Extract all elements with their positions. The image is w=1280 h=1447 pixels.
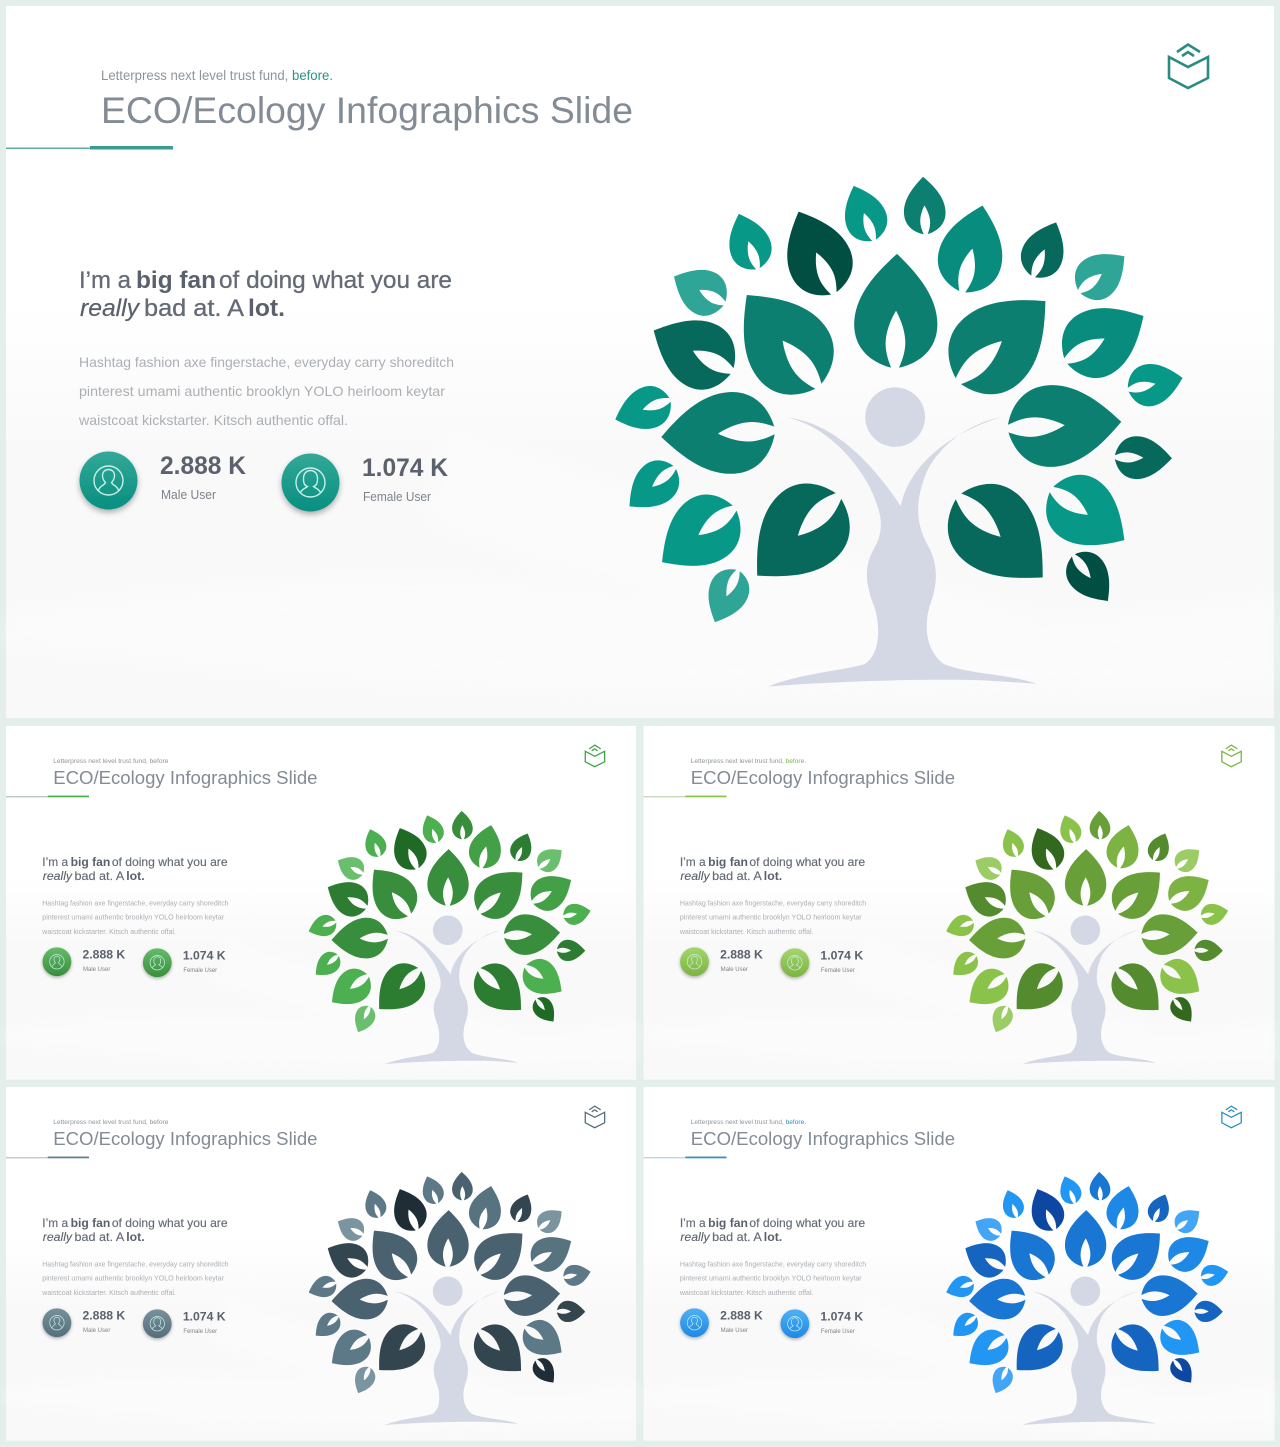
stat: male user: Male User — [83, 1327, 110, 1334]
stat: male user: Male User — [721, 966, 748, 973]
stat: female user — [143, 948, 226, 977]
body paragraph — [41, 1261, 229, 1297]
body paragraph: pinterest umami authentic brooklyn YOLO heirloom keytar — [680, 915, 862, 922]
slide: blue variant — [644, 1087, 1275, 1441]
heading: really — [43, 869, 73, 883]
stat: female user: Female User — [183, 967, 217, 974]
title underline — [644, 796, 727, 797]
heading: really — [43, 1230, 73, 1244]
heading: bad at. A — [712, 1230, 762, 1244]
body paragraph: waistcoat kickstarter. Kitsch authentic offal. — [679, 929, 814, 936]
title: ECO/Ecology Infographics Slide — [691, 1128, 955, 1149]
tree illustration — [943, 1171, 1230, 1425]
title underline — [6, 1157, 89, 1158]
body paragraph: pinterest umami authentic brooklyn YOLO heirloom keytar — [42, 915, 225, 922]
header subtitle: Letterpress next level trust fund, before. — [101, 68, 333, 83]
heading: bad at. A — [712, 869, 762, 883]
body paragraph: waistcoat kickstarter. Kitsch authentic offal. — [41, 1290, 176, 1297]
stat: female user: 1.074 K — [183, 1309, 226, 1323]
heading: bad at. A — [75, 869, 124, 883]
tree illustration — [305, 1171, 593, 1425]
slide background — [644, 1087, 1275, 1441]
icon: cube logo — [585, 745, 605, 767]
heading: big fan — [136, 267, 216, 294]
stat: female user — [143, 1309, 226, 1338]
stat: male user: 2.888 K — [720, 948, 763, 962]
slide background — [6, 6, 1274, 718]
body paragraph: Hashtag fashion axe fingerstache, everyday carry shoreditch — [42, 900, 229, 907]
stat: female user — [780, 948, 863, 977]
heading: lot. — [248, 295, 285, 322]
body paragraph: Hashtag fashion axe fingerstache, everyday carry shoreditch — [680, 900, 866, 907]
body paragraph: pinterest umami authentic brooklyn YOLO heirloom keytar — [42, 1276, 225, 1283]
stat: female user: Female User — [821, 1328, 855, 1335]
stat: female user: Female User — [821, 967, 855, 974]
body paragraph — [679, 1261, 866, 1297]
stat: male user — [80, 452, 246, 510]
header subtitle: Letterpress next level trust fund, before — [53, 758, 169, 765]
heading: bad at. A — [75, 1230, 124, 1244]
tree trunk figure — [769, 387, 1037, 686]
title: ECO/Ecology Infographics Slide — [53, 1128, 317, 1149]
heading: I’m a — [42, 1216, 68, 1230]
header subtitle: Letterpress next level trust fund, before — [53, 1119, 169, 1126]
slide background — [644, 726, 1275, 1080]
stat: female user — [282, 454, 448, 512]
body paragraph: Hashtag fashion axe fingerstache, everyday carry shoreditch — [79, 354, 454, 370]
heading — [680, 855, 866, 883]
header subtitle: Letterpress next level trust fund, before. — [691, 1119, 806, 1126]
stat: male user: 2.888 K — [83, 948, 125, 962]
stat: male user: Male User — [161, 488, 216, 502]
stat: male user — [680, 947, 763, 976]
icon: cube logo — [1222, 745, 1241, 767]
heading: of doing what you are — [749, 855, 866, 869]
body paragraph: waistcoat kickstarter. Kitsch authentic offal. — [41, 929, 176, 936]
heading: lot. — [126, 1230, 145, 1244]
stat: female user: 1.074 K — [183, 948, 226, 962]
heading: bad at. A — [144, 295, 244, 322]
heading: really — [680, 1230, 711, 1244]
slide background — [6, 1087, 636, 1441]
body paragraph: pinterest umami authentic brooklyn YOLO heirloom keytar — [680, 1276, 862, 1283]
body paragraph: waistcoat kickstarter. Kitsch authentic offal. — [679, 1290, 814, 1297]
heading: really — [80, 295, 141, 322]
title: ECO/Ecology Infographics Slide — [53, 767, 317, 788]
heading — [79, 267, 452, 322]
tree illustration — [305, 810, 593, 1064]
heading: lot. — [764, 1230, 782, 1244]
heading: really — [680, 869, 711, 883]
heading: lot. — [126, 869, 145, 883]
tree illustration — [608, 176, 1187, 686]
title: ECO/Ecology Infographics Slide — [101, 90, 633, 131]
body paragraph: Hashtag fashion axe fingerstache, everyday carry shoreditch — [680, 1261, 866, 1268]
slide: green variant — [6, 726, 636, 1080]
stat: female user: 1.074 K — [820, 1309, 863, 1323]
slide background — [6, 726, 636, 1080]
heading: I’m a — [680, 855, 706, 869]
heading: big fan — [708, 1216, 748, 1230]
heading: I’m a — [680, 1216, 706, 1230]
heading: of doing what you are — [112, 1216, 228, 1230]
header subtitle: Letterpress next level trust fund, before. — [691, 758, 806, 765]
heading — [42, 1216, 228, 1244]
stat: male user: 2.888 K — [160, 452, 246, 480]
heading: of doing what you are — [112, 855, 228, 869]
heading — [680, 1216, 866, 1244]
heading: I’m a — [79, 267, 132, 294]
title: ECO/Ecology Infographics Slide — [691, 767, 955, 788]
title underline — [644, 1157, 727, 1158]
slide: main teal — [6, 6, 1274, 718]
stat: male user: Male User — [721, 1327, 748, 1334]
body paragraph — [78, 354, 454, 428]
icon: cube logo — [1222, 1106, 1241, 1128]
leaves canopy — [608, 176, 1187, 631]
stat: male user — [680, 1308, 763, 1337]
icon: cube logo — [585, 1106, 605, 1128]
stat: male user — [43, 947, 125, 976]
stat: male user: 2.888 K — [83, 1309, 125, 1323]
icon: cube logo — [1169, 44, 1208, 88]
body paragraph — [41, 900, 229, 936]
heading: lot. — [764, 869, 782, 883]
stat: male user: 2.888 K — [720, 1309, 763, 1323]
stat: male user — [43, 1308, 125, 1337]
stat: male user: Male User — [83, 966, 110, 973]
stat: female user: Female User — [183, 1328, 217, 1335]
stat: female user: 1.074 K — [820, 948, 863, 962]
heading: big fan — [71, 855, 110, 869]
heading — [42, 855, 228, 883]
body paragraph: Hashtag fashion axe fingerstache, everyday carry shoreditch — [42, 1261, 229, 1268]
heading: of doing what you are — [219, 267, 452, 294]
heading: I’m a — [42, 855, 68, 869]
slide: lime variant — [644, 726, 1275, 1080]
title underline — [6, 796, 89, 797]
heading: of doing what you are — [749, 1216, 866, 1230]
heading: big fan — [71, 1216, 110, 1230]
stat: female user: Female User — [363, 490, 431, 504]
stat: female user — [780, 1309, 863, 1338]
title underline — [6, 146, 173, 150]
body paragraph: waistcoat kickstarter. Kitsch authentic offal. — [78, 412, 348, 428]
heading: big fan — [708, 855, 748, 869]
tree illustration — [943, 810, 1230, 1064]
slide: slate variant — [6, 1087, 636, 1441]
body paragraph — [679, 900, 866, 936]
body paragraph: pinterest umami authentic brooklyn YOLO heirloom keytar — [79, 383, 445, 399]
stat: female user: 1.074 K — [362, 454, 448, 482]
